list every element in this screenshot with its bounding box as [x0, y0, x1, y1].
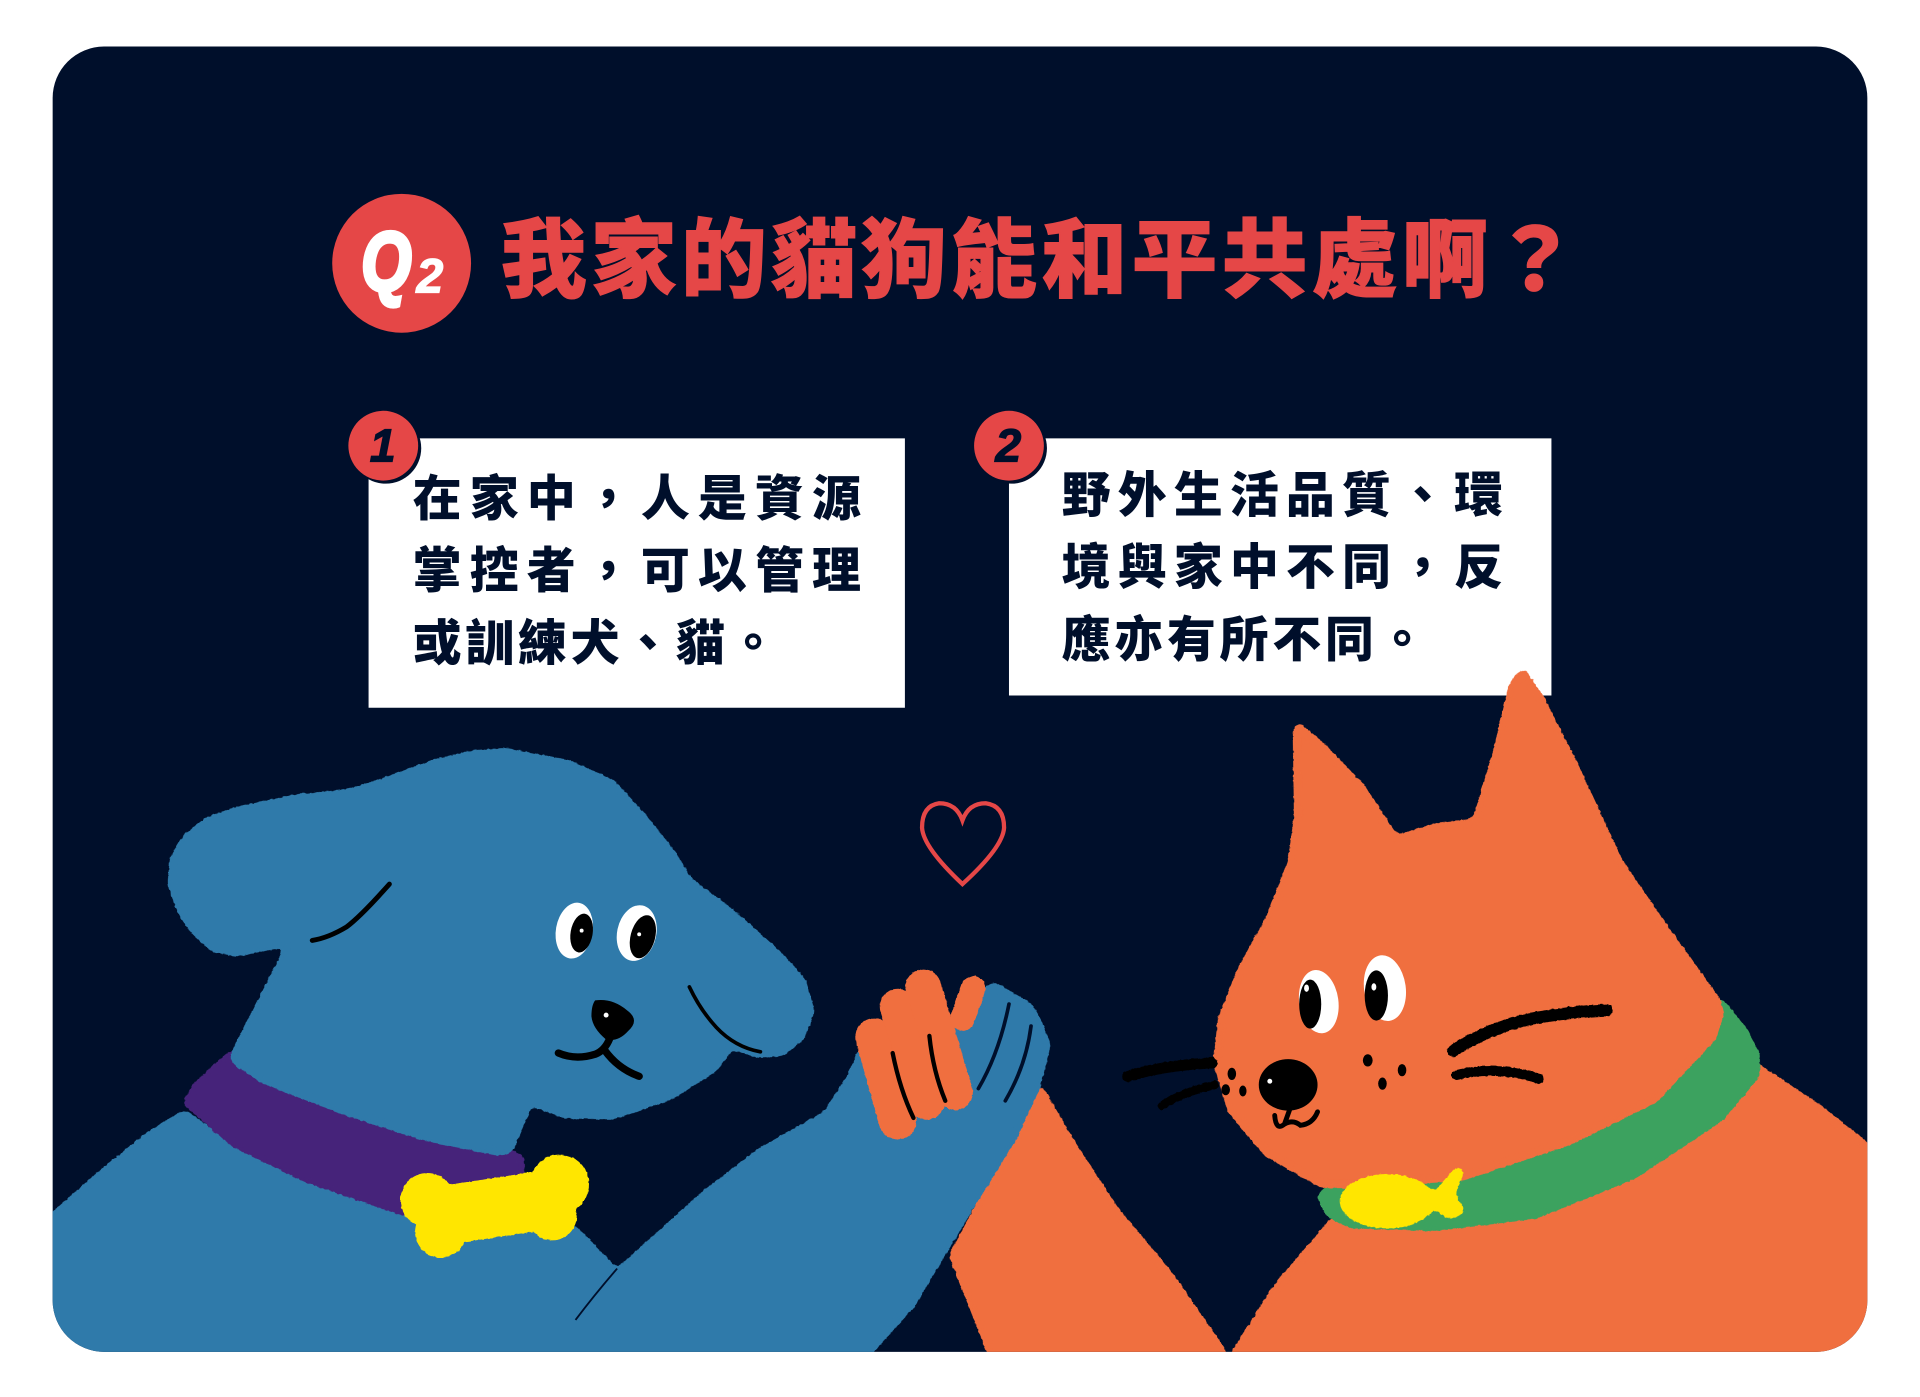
- cat collar: [1316, 998, 1760, 1231]
- icon: heart: [922, 803, 1004, 884]
- box 2 text: [1062, 469, 1510, 667]
- dog body and arm: [31, 982, 1051, 1378]
- box 2 text: 應亦有所不同。: [1062, 613, 1430, 667]
- cat: [1128, 667, 1886, 1378]
- dog: [31, 748, 1051, 1378]
- cat arm: [950, 1088, 1226, 1352]
- dog eyes: [556, 902, 657, 961]
- cat freckles: [1221, 1054, 1406, 1097]
- cat finger lines: [893, 1036, 945, 1118]
- number badge 1: [348, 411, 421, 484]
- cat head: [1213, 667, 1724, 1188]
- cat body: [1232, 1064, 1868, 1352]
- cat nose and mouth: [1259, 1059, 1318, 1126]
- dog bone charm: [400, 1155, 589, 1258]
- number badge 2: 2: [994, 420, 1021, 472]
- heading text: 我家的貓狗能和平共處啊？: [501, 213, 1582, 309]
- Q2 badge: [332, 194, 471, 333]
- box 1 text: [413, 473, 869, 671]
- Q2 badge: Q: [361, 215, 411, 308]
- Q2 badge: 2: [415, 251, 444, 304]
- dog collar: [182, 1049, 524, 1216]
- dog nose and mouth: [558, 1000, 639, 1076]
- ear lines: [312, 884, 760, 1052]
- cat hand: [874, 987, 973, 1120]
- illustration: dog and cat: [31, 667, 1886, 1378]
- panel: text box 1: [348, 411, 905, 708]
- box 1 text: 或訓練犬、貓。: [413, 617, 781, 671]
- box 1 text: 掌控者，可以管理: [413, 545, 869, 599]
- box 2 text: 境與家中不同，反: [1062, 541, 1510, 595]
- cat fish charm: [1340, 1166, 1466, 1228]
- box 1 text: 在家中，人是資源: [413, 473, 869, 527]
- dog paw finger lines: [978, 1004, 1031, 1101]
- arm crease: [576, 1269, 617, 1320]
- number badge 2: [974, 411, 1047, 484]
- panel: text box 2: [974, 411, 1551, 696]
- title: [332, 194, 1582, 333]
- number badge 1: 1: [370, 420, 396, 472]
- box 2 text: 野外生活品質、環: [1062, 469, 1510, 523]
- cat whiskers: [1128, 1010, 1607, 1106]
- dog head: [168, 748, 814, 1156]
- cat eyes: [1298, 955, 1406, 1034]
